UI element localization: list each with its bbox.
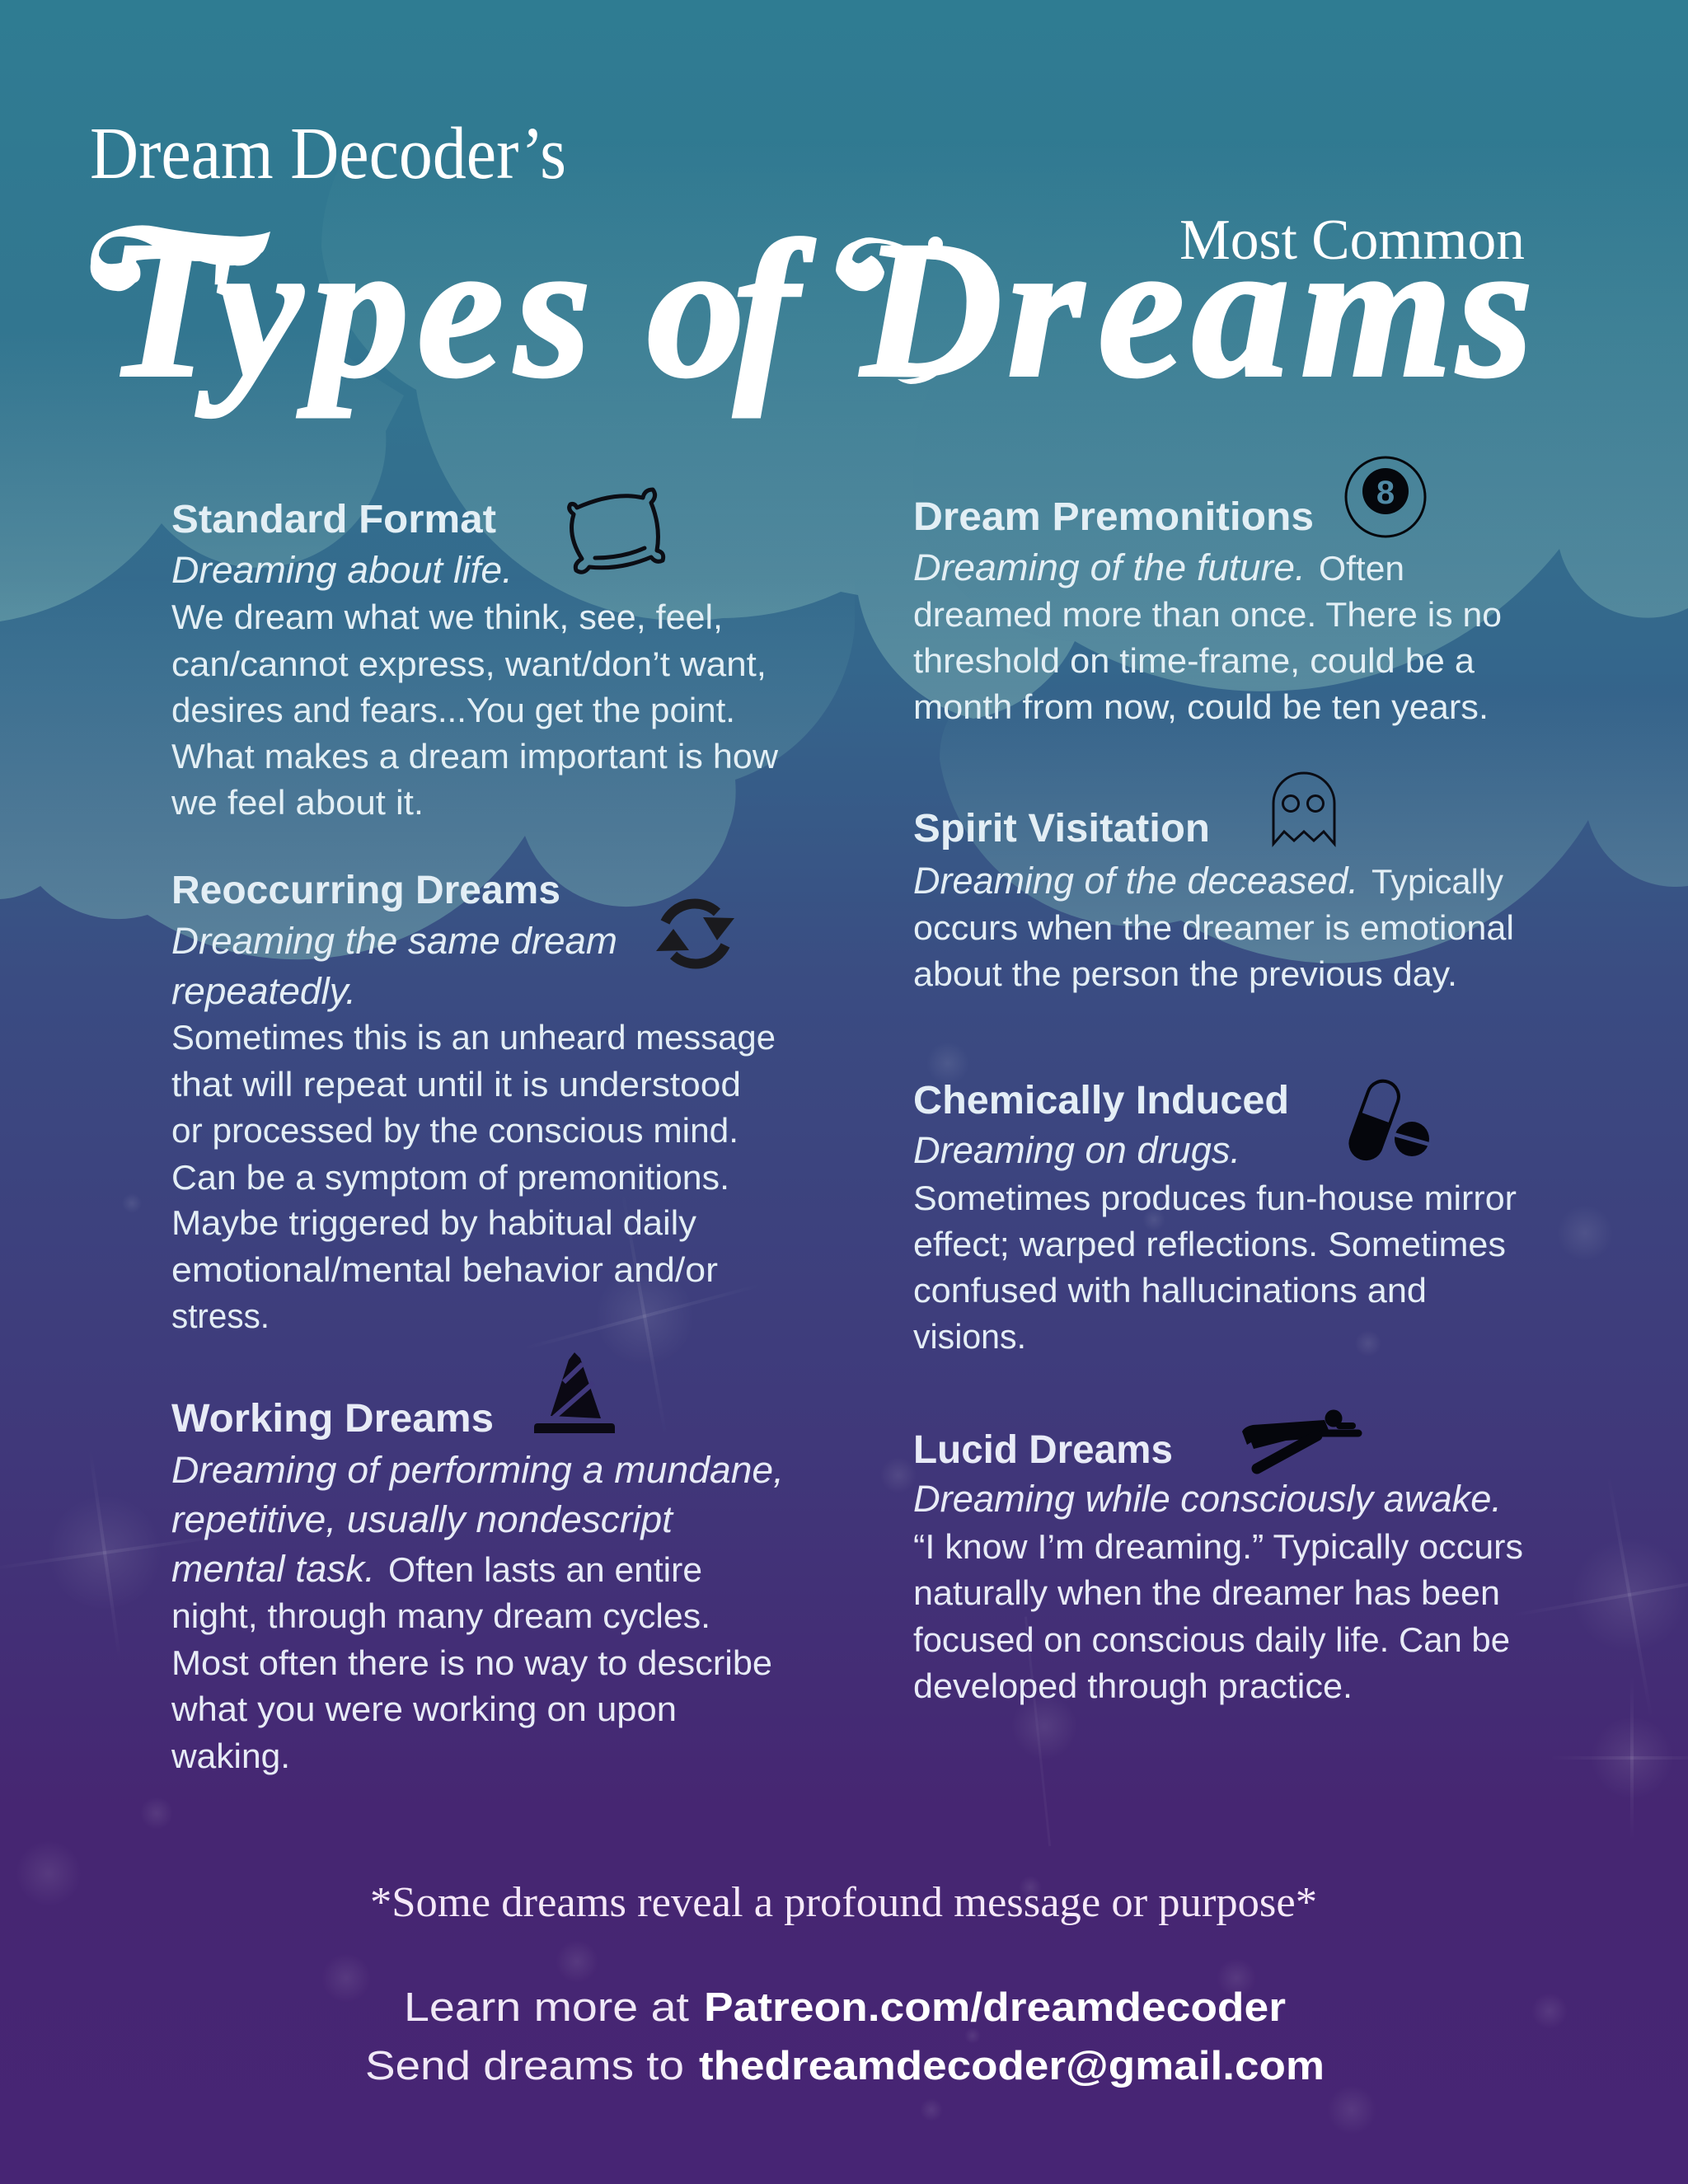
section: Dream Premonitions: month from now, could be ten years. <box>913 687 1489 726</box>
section: Reoccurring Dreams: Maybe triggered by habitual daily <box>171 1203 696 1242</box>
section: Working Dreams: waking. <box>171 1736 290 1775</box>
sparkles <box>0 1042 1688 2135</box>
section: Lucid Dreams: naturally when the dreamer has been <box>913 1573 1500 1612</box>
section: Reoccurring Dreams: repeatedly. <box>171 970 356 1012</box>
section: Chemically Induced <box>913 1079 1517 1356</box>
section: Reoccurring Dreams: Reoccurring Dreams <box>171 869 560 912</box>
section: Chemically Induced: Sometimes produces fun-house mirror <box>913 1179 1517 1217</box>
section: Dream Premonitions: Often <box>1319 549 1404 588</box>
section: Reoccurring Dreams: Sometimes this is an unheard message <box>171 1018 776 1057</box>
subtitle: Most Common: Most Common <box>1179 209 1525 272</box>
icon: flying figure <box>1242 1409 1358 1469</box>
section: Lucid Dreams: developed through practice. <box>913 1666 1353 1705</box>
section: Lucid Dreams: “I know I’m dreaming.” Typically occurs <box>913 1527 1523 1566</box>
section: Working Dreams: what you were working on upon <box>171 1690 677 1728</box>
icon: wizard hat <box>534 1352 615 1433</box>
section: Lucid Dreams: focused on conscious daily life. Can be <box>913 1620 1510 1659</box>
section: Working Dreams: Often lasts an entire <box>388 1550 702 1589</box>
icon: pills <box>1343 1076 1431 1165</box>
footer: send dreams: thedreamdecoder@gmail.com <box>699 2044 1325 2088</box>
section: Spirit Visitation: about the person the previous day. <box>913 954 1457 993</box>
section: Dream Premonitions: threshold on time-frame, could be a <box>913 641 1475 680</box>
section: Spirit Visitation <box>913 807 1514 993</box>
section: Standard Format: We dream what we think, see, feel, <box>171 598 723 636</box>
section: Reoccurring Dreams: Can be a symptom of premonitions. <box>171 1158 729 1197</box>
section: Lucid Dreams: Lucid Dreams <box>913 1428 1173 1472</box>
section: Working Dreams: night, through many dream cycles. <box>171 1596 710 1635</box>
section: Dream Premonitions: dreamed more than once. There is no <box>913 595 1502 634</box>
section: Dream Premonitions: Dreaming of the future. <box>913 546 1306 588</box>
title: Types of Dreams: Types of Dreams <box>106 202 1533 418</box>
section: Reoccurring Dreams: emotional/mental behavior and/or <box>171 1250 718 1289</box>
section: Chemically Induced: confused with hallucinations and <box>913 1271 1427 1310</box>
section: Reoccurring Dreams: Dreaming the same dream <box>171 920 617 962</box>
section: Working Dreams <box>171 1397 784 1775</box>
footer: learn more: Patreon.com/dreamdecoder <box>704 1985 1286 2030</box>
icon: eight ball <box>1346 457 1425 537</box>
section: Chemically Induced: visions. <box>913 1317 1026 1356</box>
footer: send dreams <box>365 2044 1325 2088</box>
footer: learn more: Learn more at <box>404 1985 689 2030</box>
section: Reoccurring Dreams <box>171 869 776 1335</box>
section: Working Dreams: Working Dreams <box>171 1397 494 1441</box>
section: Standard Format: we feel about it. <box>171 783 424 822</box>
section: Working Dreams: Most often there is no way to describe <box>171 1643 772 1682</box>
section: Working Dreams: Dreaming of performing a mundane, <box>171 1449 784 1491</box>
section: Standard Format: Standard Format <box>171 498 496 541</box>
section: Dream Premonitions: Dream Premonitions <box>913 495 1314 539</box>
section: Standard Format <box>171 498 779 822</box>
section: Working Dreams: mental task. <box>171 1548 375 1590</box>
section: Dream Premonitions <box>913 495 1502 726</box>
section: Spirit Visitation: occurs when the dreamer is emotional <box>913 908 1514 947</box>
footer: learn more <box>404 1985 1286 2030</box>
section: Standard Format: desires and fears...You get the point. <box>171 691 735 729</box>
icon: eight ball: 8 <box>1376 475 1395 511</box>
section: Standard Format: can/cannot express, want/don’t want, <box>171 644 767 683</box>
section: Spirit Visitation: Typically <box>1372 862 1503 901</box>
tagline: *Some dreams reveal a profound message or purpose* <box>370 1879 1317 1926</box>
section: Reoccurring Dreams: stress. <box>171 1296 270 1335</box>
title: Dream Decoder's: Dream Decoder’s <box>90 113 566 194</box>
section: Lucid Dreams <box>913 1428 1523 1705</box>
section: Spirit Visitation: Dreaming of the deceased. <box>913 860 1358 902</box>
section: Chemically Induced: effect; warped reflections. Sometimes <box>913 1225 1506 1263</box>
icon: ghost <box>1273 773 1334 844</box>
icon: pillow <box>570 490 663 572</box>
section: Reoccurring Dreams: or processed by the conscious mind. <box>171 1111 738 1150</box>
section: Standard Format: What makes a dream important is how <box>171 737 779 776</box>
section: Lucid Dreams: Dreaming while consciously awake. <box>913 1478 1502 1520</box>
clouds <box>0 58 1688 963</box>
section: Chemically Induced: Dreaming on drugs. <box>913 1129 1240 1171</box>
section: Spirit Visitation: Spirit Visitation <box>913 807 1210 851</box>
section: Working Dreams: repetitive, usually nondescript <box>171 1498 675 1540</box>
icon: refresh arrows <box>656 903 734 964</box>
section: Reoccurring Dreams: that will repeat until it is understood <box>171 1065 741 1104</box>
footer: send dreams: Send dreams to <box>365 2044 684 2088</box>
section: Standard Format: Dreaming about life. <box>171 549 513 591</box>
section: Chemically Induced: Chemically Induced <box>913 1079 1289 1122</box>
